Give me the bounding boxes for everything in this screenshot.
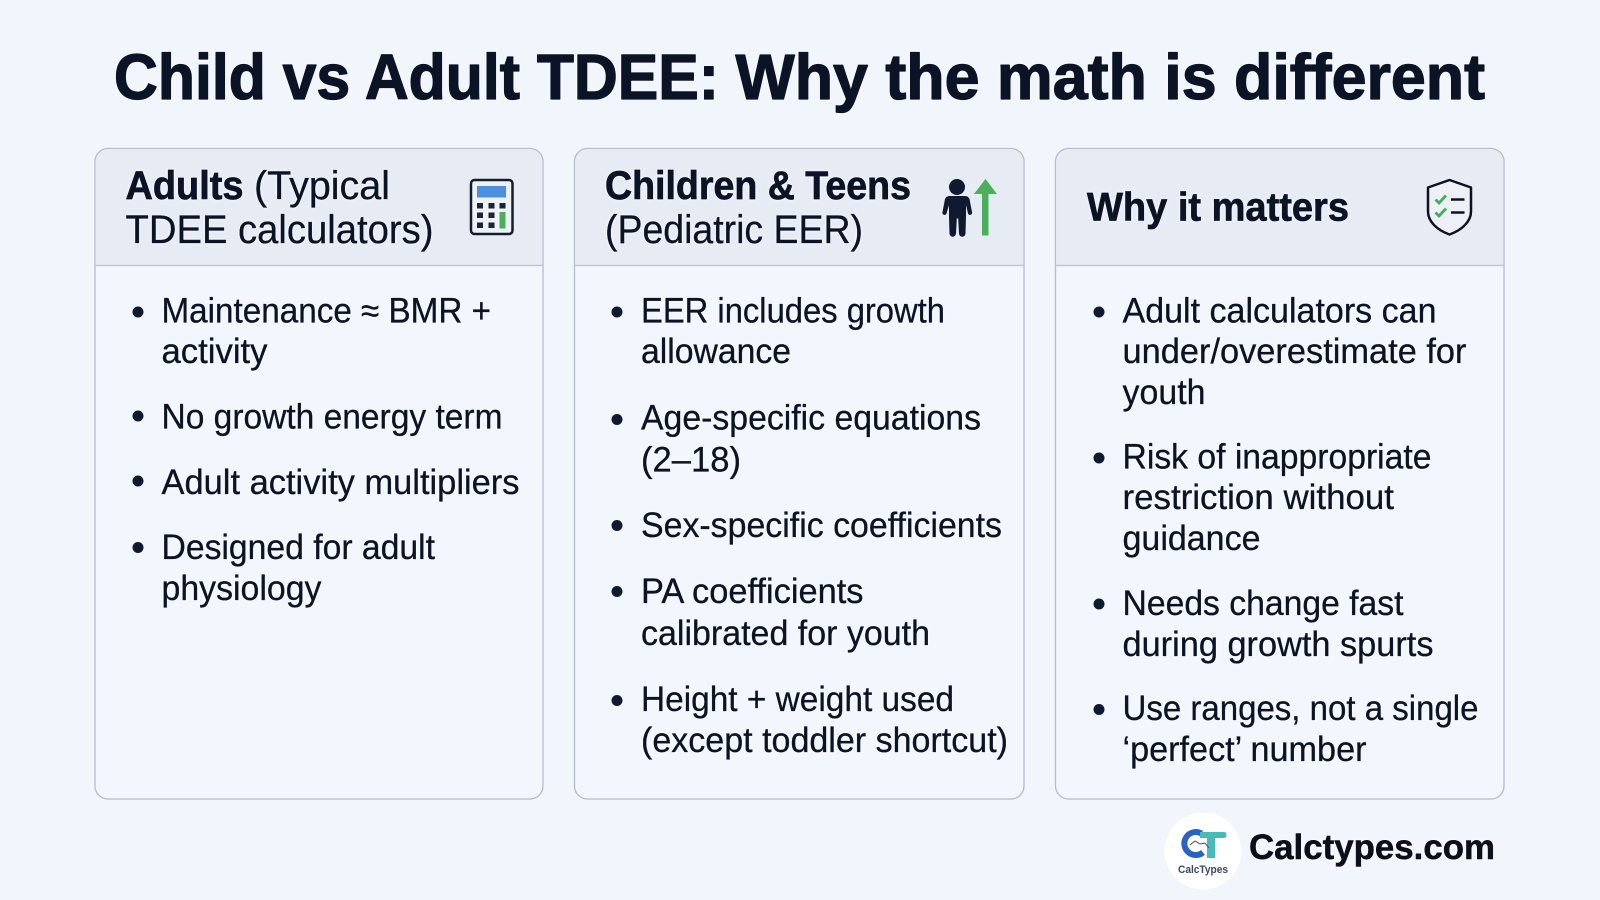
panel header: why it matters xyxy=(1056,149,1504,266)
brand name: Calctypes.com xyxy=(1249,828,1495,867)
icon: child with growth arrow xyxy=(942,179,997,237)
heading: why it matters: Why it matters xyxy=(1087,186,1349,230)
bullet list: children and teens: (except toddler shortcut) xyxy=(641,721,1008,760)
title: Why the math is different xyxy=(736,41,1485,113)
heading: adults: TDEE calculators) xyxy=(126,208,434,252)
bullet list: why it matters: under/overestimate for xyxy=(1122,332,1467,371)
bullet list: children and teens: Height + weight used xyxy=(641,680,954,719)
logo badge: Calctypes: CalcTypes xyxy=(1178,864,1228,876)
bullet list: adults xyxy=(132,292,520,608)
bullet list: children and teens: (2–18) xyxy=(641,440,741,480)
bullet list: children and teens: EER includes growth xyxy=(641,292,945,330)
bullet list: adults: Maintenance ≈ BMR + xyxy=(162,292,491,330)
bullet list: adults: physiology xyxy=(162,569,322,608)
title xyxy=(114,41,1485,113)
bullet list: children and teens: Sex-specific coefficients xyxy=(641,506,1002,545)
bullet list: children and teens: calibrated for youth xyxy=(641,614,930,653)
bullet list: adults: No growth energy term xyxy=(162,398,502,436)
panel: adults xyxy=(95,148,543,799)
bullet list: children and teens: allowance xyxy=(641,332,791,371)
panel header: adults xyxy=(95,149,543,266)
bullet list: why it matters: Adult calculators can xyxy=(1122,292,1436,330)
panel: why it matters xyxy=(1056,148,1504,799)
panel header: children and teens xyxy=(574,149,1024,266)
bullet list: why it matters: restriction without xyxy=(1122,478,1394,517)
bullet list: adults: Adult activity multipliers xyxy=(162,463,520,502)
heading: adults: (Typical xyxy=(254,164,390,208)
bullet list: why it matters: Needs change fast xyxy=(1122,584,1404,623)
bullet list: why it matters: Risk of inappropriate xyxy=(1122,438,1432,476)
bullet list: children and teens: PA coefficients xyxy=(641,572,864,611)
heading: children and teens: (Pediatric EER) xyxy=(605,208,863,252)
bullet list: children and teens: Age-specific equations xyxy=(641,398,981,438)
bullet list: why it matters: youth xyxy=(1122,373,1206,412)
title: Child vs Adult TDEE: xyxy=(114,41,719,113)
heading: adults xyxy=(126,164,434,252)
bullet list: why it matters: ‘perfect’ number xyxy=(1122,730,1367,769)
heading: children and teens: Children & Teens xyxy=(605,164,911,208)
bullet list: why it matters xyxy=(1094,292,1478,769)
bullet list: adults: activity xyxy=(162,332,268,371)
bullet list: why it matters: during growth spurts xyxy=(1122,625,1434,664)
icon: calculator xyxy=(471,180,512,234)
bullet list: why it matters: Use ranges, not a single xyxy=(1122,689,1478,728)
bullet list: adults: Designed for adult xyxy=(162,528,435,567)
icon: shield checklist xyxy=(1428,180,1471,234)
panel: children and teens xyxy=(574,148,1024,799)
bullet list: children and teens xyxy=(612,292,1008,760)
bullet list: why it matters: guidance xyxy=(1122,519,1260,558)
heading: adults: Adults xyxy=(126,164,244,208)
logo badge: Calctypes xyxy=(1164,812,1242,890)
heading: children and teens xyxy=(605,164,911,252)
